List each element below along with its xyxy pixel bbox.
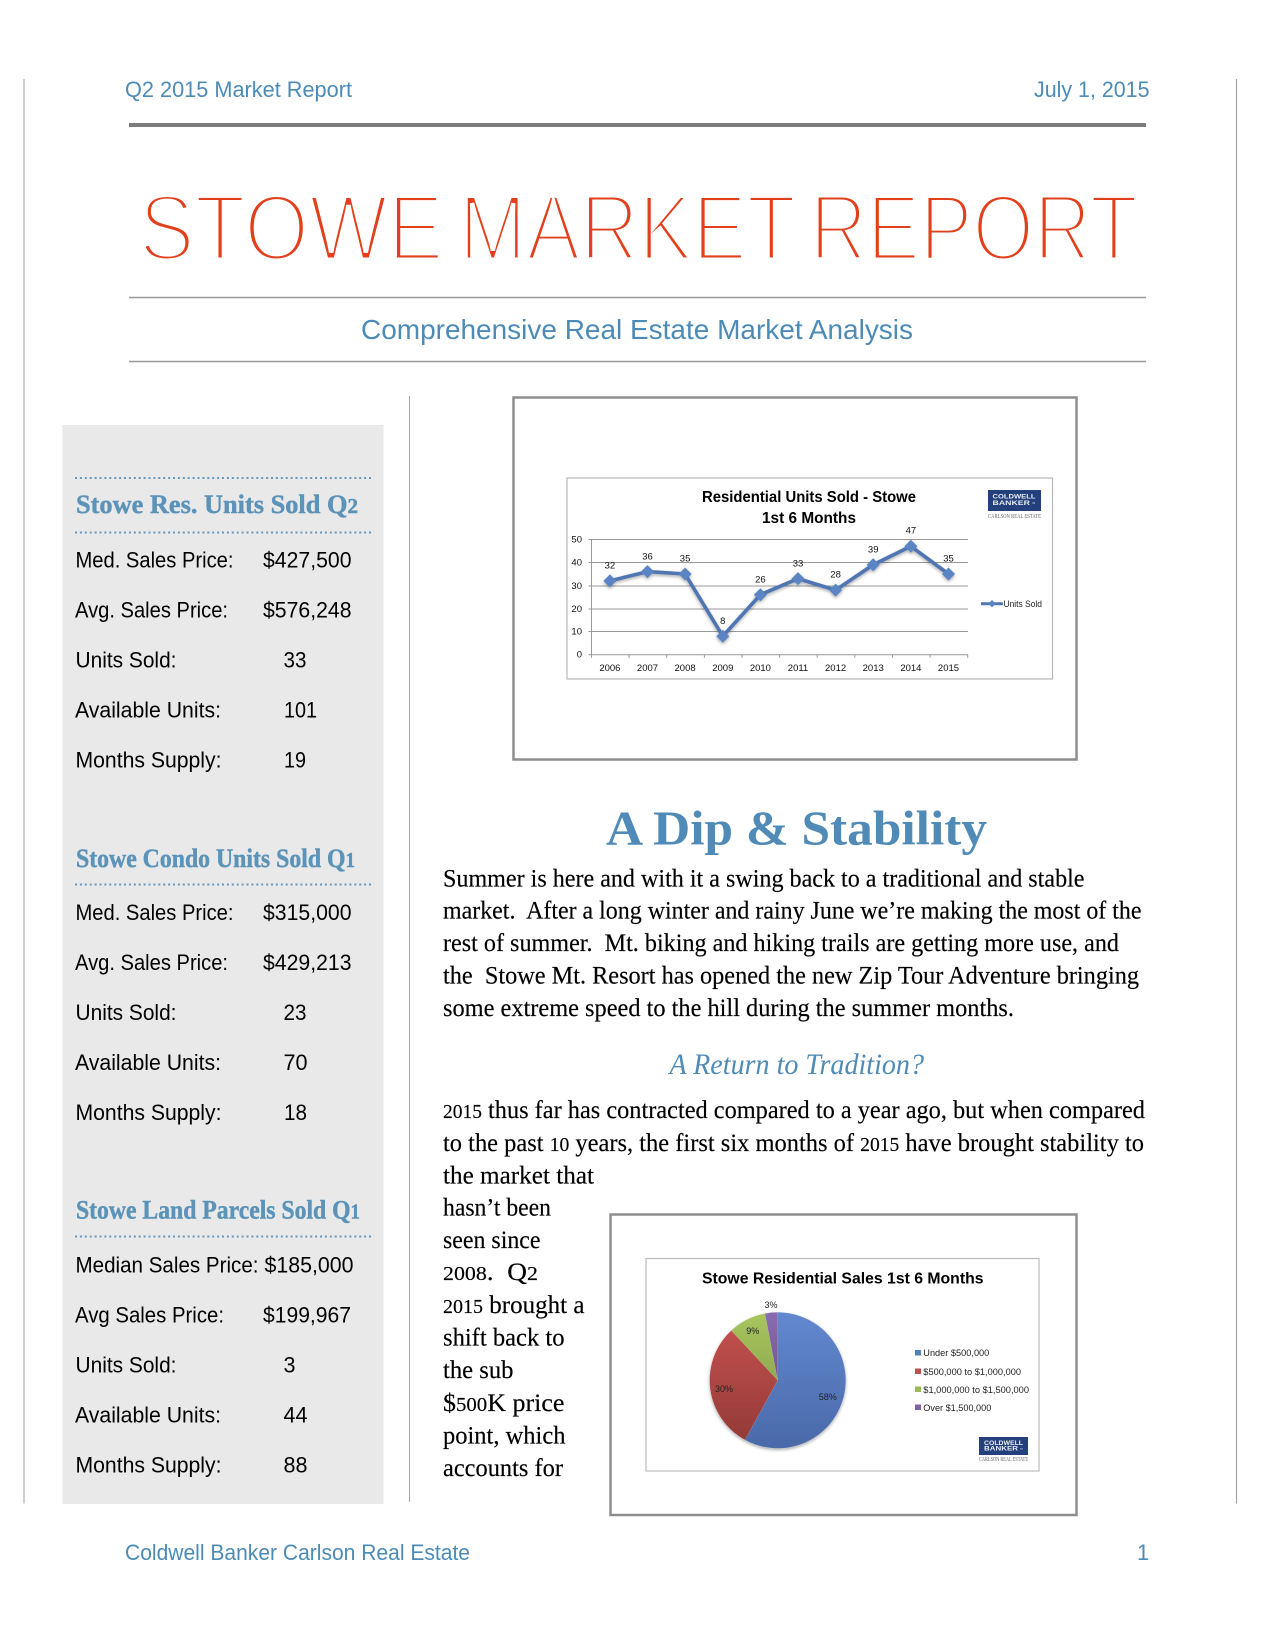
text block: second paragraph: to the past 10 years, the first six months of 2015 have brought stability to	[443, 1130, 1144, 1157]
heading: residential units: Stowe Res. Units Sold Q2	[76, 490, 358, 519]
data labels: 35	[680, 554, 690, 564]
pie legend	[915, 1348, 1029, 1414]
pie legend: $500,000 to $1,000,000	[923, 1367, 1021, 1378]
stats: condo: $315,000	[263, 900, 352, 925]
data labels: 28	[830, 570, 841, 580]
text block: second paragraph: 2008. Q2	[443, 1259, 538, 1286]
y axis labels	[571, 534, 582, 660]
text block: second paragraph: 2015 thus far has contracted compared to a year ago, but when compared	[443, 1097, 1145, 1124]
y axis labels: 40	[571, 558, 582, 568]
stats: land: 88	[284, 1452, 308, 1477]
text block: second paragraph: shift back to	[443, 1324, 564, 1352]
stats: land: Median Sales Price:	[76, 1252, 258, 1277]
y axis labels: 50	[571, 534, 582, 546]
pie chart: residential sales by price	[610, 1214, 1076, 1515]
stats: condo: Available Units:	[75, 1050, 221, 1075]
chart legend: Units Sold	[1004, 599, 1042, 610]
icon: Coldwell Banker logo: COLDWELL	[984, 1441, 1023, 1447]
text block: intro paragraph: the Stowe Mt. Resort has opened the new Zip Tour Adventure bringing	[443, 962, 1139, 990]
stats: residential: $576,248	[263, 598, 352, 623]
subheading: A Return to Tradition?: A Return to Tradition?	[668, 1048, 924, 1081]
heading: land parcels: Stowe Land Parcels Sold Q1	[76, 1196, 360, 1224]
stats: condo	[75, 900, 352, 1125]
x axis labels: 2008	[675, 663, 696, 674]
pie legend: Under $500,000	[923, 1348, 989, 1359]
title: REPORT	[810, 175, 1138, 280]
stats: land: $185,000	[264, 1252, 354, 1277]
x axis labels: 2014	[900, 663, 921, 674]
x axis labels: 2013	[863, 663, 884, 674]
data line	[603, 540, 955, 643]
footer: company name: Coldwell Banker Carlson Real Estate	[125, 1540, 470, 1565]
x axis labels: 2015	[938, 663, 959, 674]
stats: condo: $429,213	[263, 950, 352, 975]
x axis labels: 2012	[825, 663, 846, 674]
title	[139, 175, 1138, 280]
y axis labels: 30	[571, 581, 582, 592]
text block: intro paragraph	[443, 866, 1142, 1022]
data labels: 33	[793, 558, 803, 570]
x axis labels: 2010	[750, 663, 771, 674]
stats: land: Months Supply:	[76, 1452, 222, 1477]
x axis labels: 2007	[637, 663, 658, 674]
stats: residential: 33	[284, 648, 306, 673]
stats: land: 3	[284, 1352, 296, 1377]
stats: land	[75, 1252, 354, 1477]
icon: Coldwell Banker logo: BANKER ▫	[992, 500, 1036, 507]
stats: residential	[75, 548, 352, 773]
icon: Coldwell Banker logo: CARLSON REAL ESTATE	[979, 1457, 1028, 1463]
data labels: 35	[943, 554, 954, 564]
stats: residential: Avg. Sales Price:	[75, 598, 228, 623]
text block: intro paragraph: rest of summer. Mt. biking and hiking trails are getting more use, and	[443, 930, 1119, 957]
text block: second paragraph: point, which	[443, 1422, 566, 1450]
footer: page number: 1	[1137, 1540, 1149, 1565]
pie labels: 30%	[715, 1384, 733, 1394]
text block: second paragraph: seen since	[443, 1227, 540, 1254]
stats: land: $199,967	[263, 1302, 351, 1327]
y axis labels: 10	[571, 626, 582, 638]
chart legend	[981, 599, 1042, 610]
stats: land: Available Units:	[75, 1402, 221, 1427]
header: report label: Q2 2015 Market Report	[125, 77, 352, 102]
text block: second paragraph	[443, 1097, 1145, 1482]
text block: intro paragraph: Summer is here and with it a swing back to a traditional and stable	[443, 866, 1084, 892]
data labels: 47	[906, 526, 916, 536]
heading: A Dip & Stability: A Dip & Stability	[606, 800, 988, 856]
pie legend: Over $1,500,000	[923, 1403, 991, 1414]
stats: condo: Avg. Sales Price:	[75, 950, 228, 975]
data labels: 26	[755, 574, 766, 586]
x axis labels: 2009	[712, 663, 733, 674]
panel: sidebar statistics	[62, 425, 384, 1504]
pie labels: 58%	[819, 1392, 837, 1402]
stats: residential: 101	[284, 698, 317, 723]
y axis labels: 0	[577, 650, 582, 660]
stats: residential: Available Units:	[75, 698, 221, 723]
stats: condo: Months Supply:	[76, 1100, 222, 1125]
pie chart title: Stowe Residential Sales 1st 6 Months	[702, 1270, 984, 1288]
stats: land: 44	[284, 1402, 308, 1427]
text block: intro paragraph: market. After a long winter and rainy June we’re making the most of the	[443, 898, 1142, 924]
heading: condo units: Stowe Condo Units Sold Q1	[76, 844, 355, 873]
data labels: 32	[605, 560, 615, 572]
x axis labels	[599, 663, 959, 674]
icon: Coldwell Banker logo: BANKER ▫	[984, 1446, 1023, 1452]
stats: condo: 18	[284, 1100, 307, 1125]
data labels: 39	[868, 544, 878, 556]
chart title: Residential Units Sold - Stowe	[702, 489, 916, 506]
pie labels	[715, 1300, 837, 1402]
pie labels: 9%	[746, 1326, 759, 1336]
pie labels: 3%	[764, 1300, 778, 1310]
line chart: residential units sold	[514, 398, 1076, 760]
stats: land: Units Sold:	[76, 1352, 176, 1377]
icon: Coldwell Banker logo	[988, 490, 1041, 520]
pie slices	[710, 1312, 846, 1448]
stats: residential: $427,500	[263, 548, 352, 573]
x axis labels: 2006	[599, 663, 620, 674]
icon: Coldwell Banker logo: CARLSON REAL ESTATE	[988, 513, 1041, 520]
stats: residential: 19	[284, 748, 306, 773]
stats: condo: 23	[284, 1000, 306, 1025]
icon: Coldwell Banker logo: COLDWELL	[992, 494, 1036, 500]
title: STOWE	[139, 175, 444, 280]
x axis labels: 2011	[788, 663, 808, 674]
y axis labels: 20	[571, 604, 582, 615]
subtitle: Comprehensive Real Estate Market Analysis	[361, 314, 913, 345]
chart title	[702, 489, 916, 527]
text block: second paragraph: accounts for	[443, 1455, 564, 1482]
text block: second paragraph: hasn’t been	[443, 1194, 551, 1222]
text block: second paragraph: the sub	[443, 1357, 514, 1384]
text block: second paragraph: 2015 brought a	[443, 1292, 584, 1319]
stats: condo: Units Sold:	[76, 1000, 176, 1025]
data labels: 36	[642, 552, 653, 562]
stats: residential: Units Sold:	[76, 648, 176, 673]
chart title: 1st 6 Months	[762, 510, 856, 527]
data labels	[605, 526, 954, 627]
pie legend: $1,000,000 to $1,500,000	[923, 1385, 1029, 1396]
stats: condo: Med. Sales Price:	[76, 900, 234, 925]
title: MARKET	[459, 175, 796, 280]
stats: residential: Months Supply:	[76, 748, 222, 773]
text block: intro paragraph: some extreme speed to the hill during the summer months.	[443, 995, 1014, 1022]
stats: condo: 70	[284, 1050, 308, 1075]
stats: land: Avg Sales Price:	[75, 1302, 224, 1327]
text block: second paragraph: the market that	[443, 1162, 594, 1190]
header: date: July 1, 2015	[1034, 77, 1150, 102]
icon: Coldwell Banker logo	[979, 1437, 1028, 1463]
text block: second paragraph: $500K price	[443, 1390, 564, 1417]
stats: residential: Med. Sales Price:	[76, 548, 234, 573]
data labels: 8	[720, 616, 725, 627]
